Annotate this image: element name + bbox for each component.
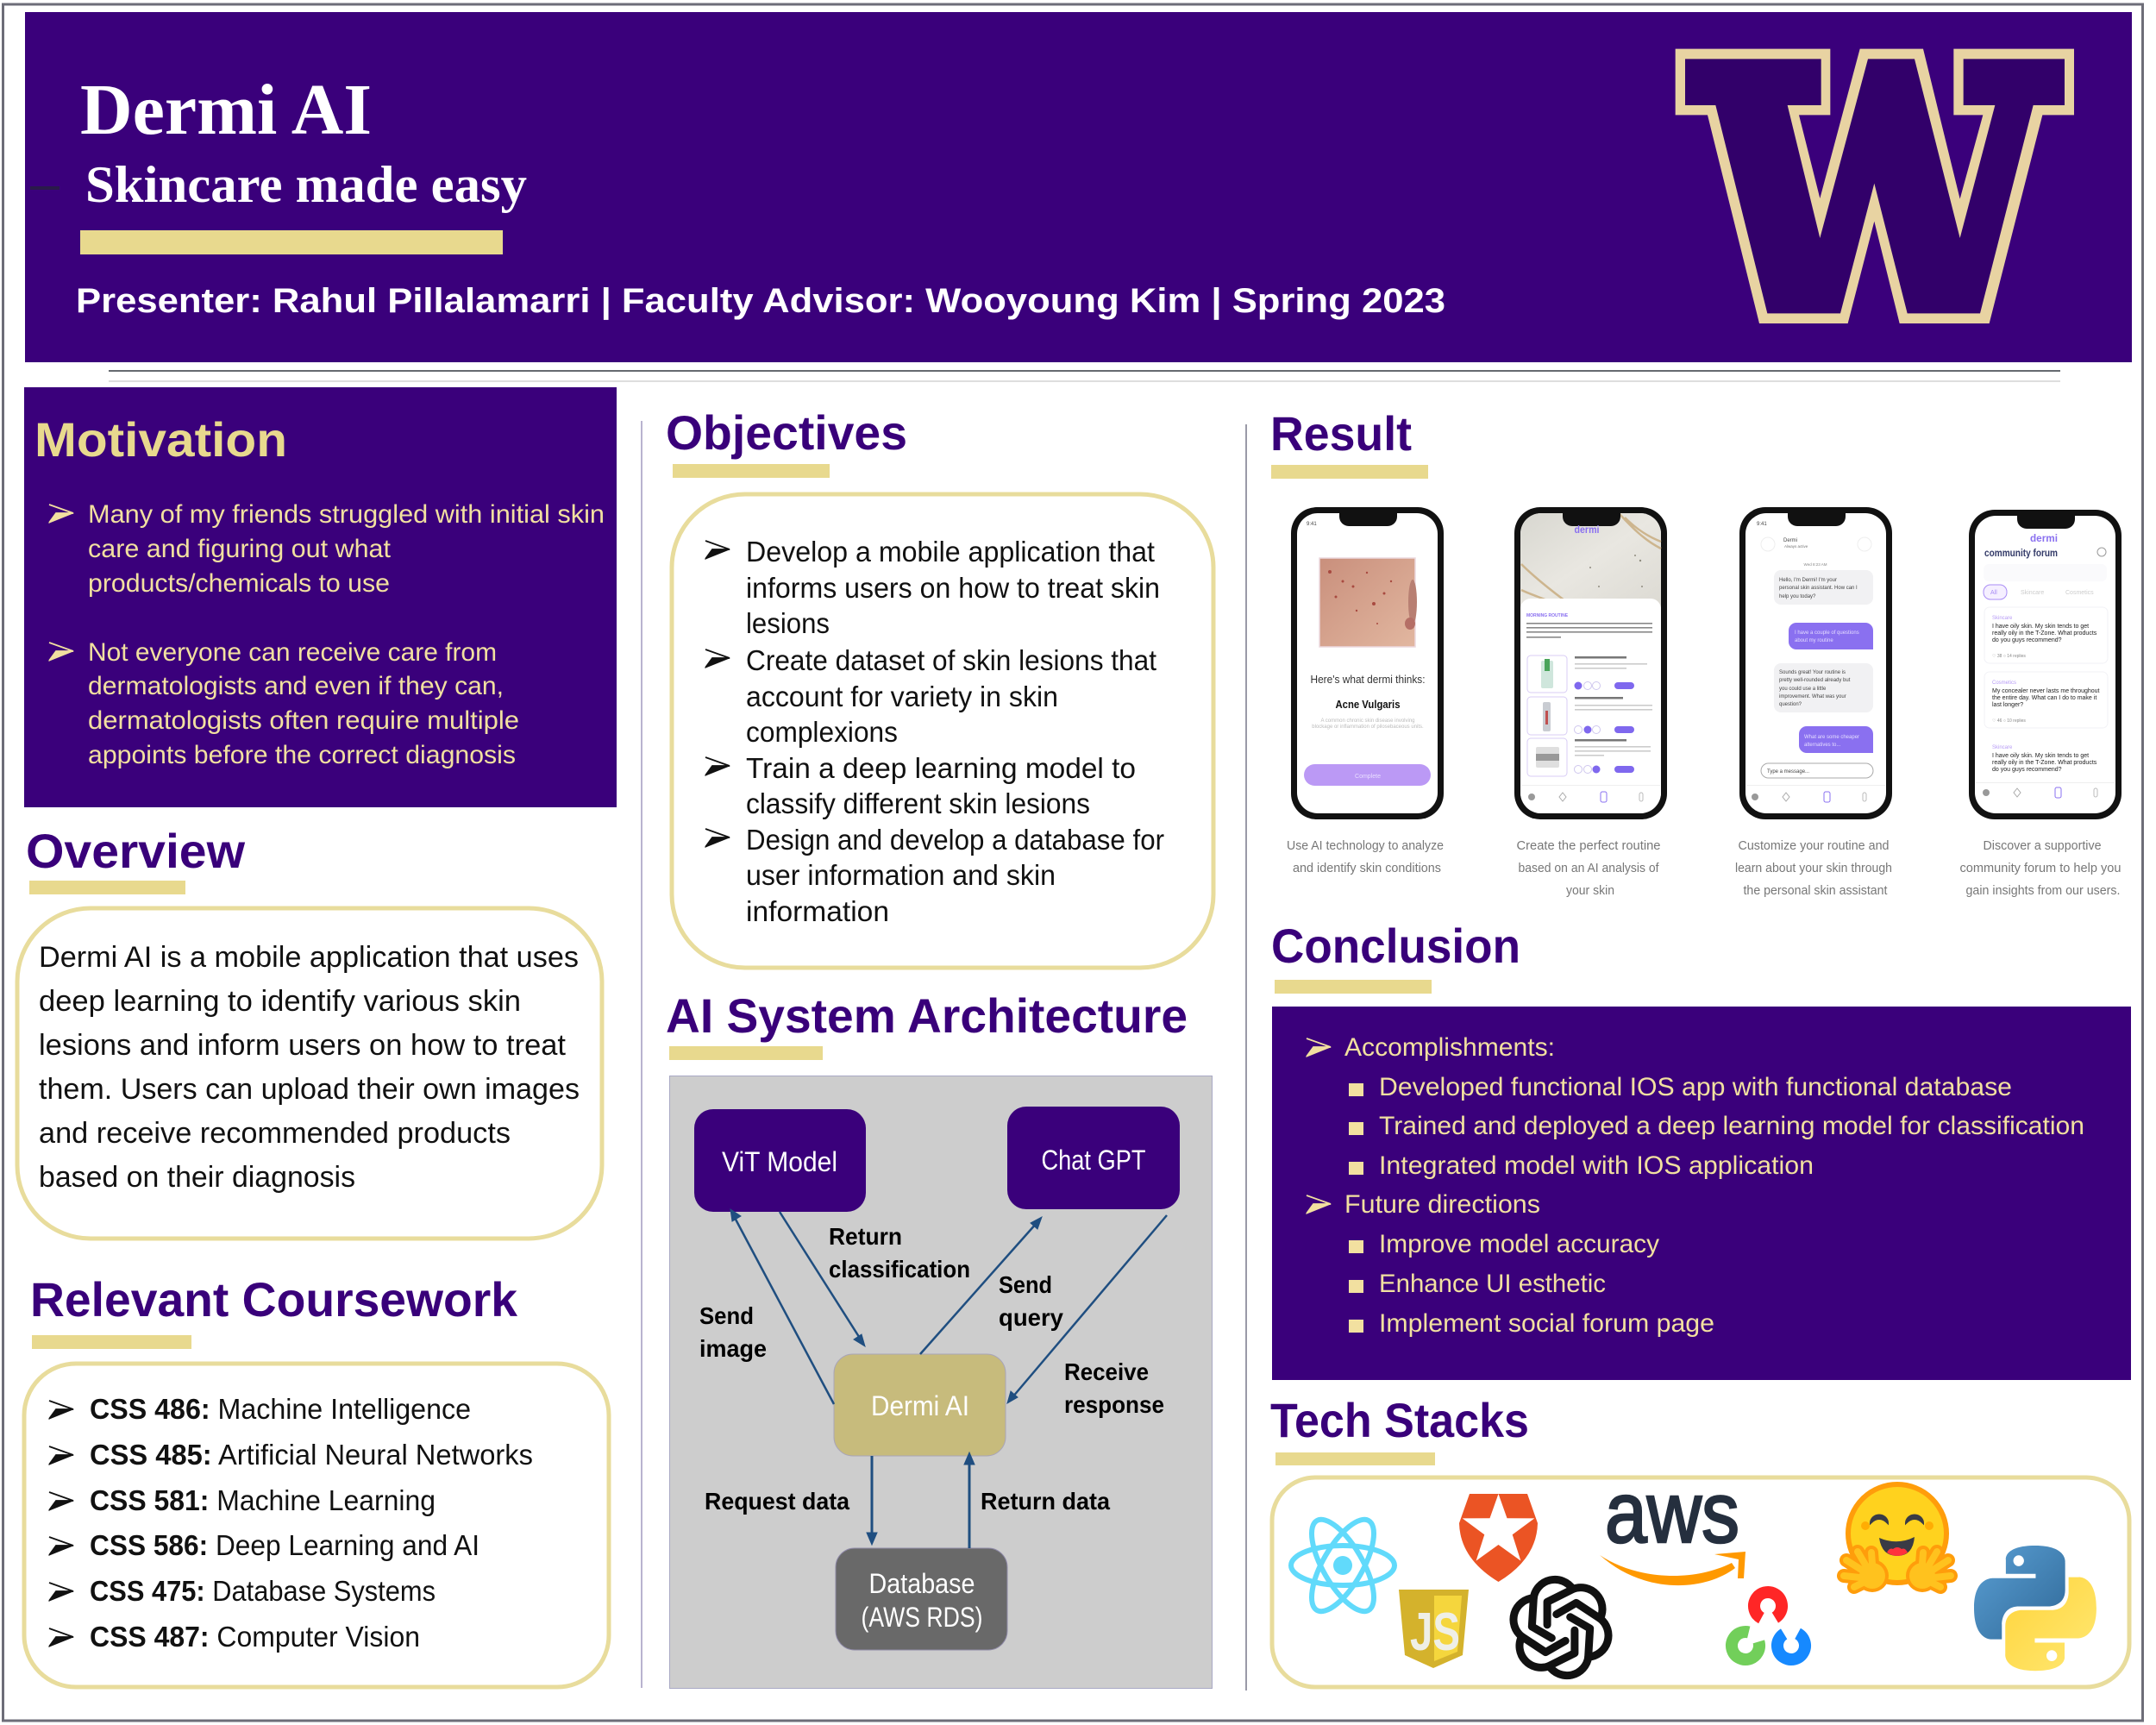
heading: conclusion: Conclusion [1271, 919, 1520, 973]
chat bubbles: alternatives to... [1804, 743, 1841, 748]
panel: conclusion list: Accomplishments: [1344, 1033, 1555, 1062]
overview paragraph: lesions and inform users on how to treat [39, 1029, 567, 1062]
objectives list: Create dataset of skin lesions that [746, 644, 1156, 676]
forum posts: really oily in the T-Zone. What products [1992, 760, 2097, 766]
gold title bar [80, 230, 503, 254]
chat bubbles: I have a couple of questions [1795, 630, 1859, 636]
title: Dermi AI [80, 70, 372, 150]
panel: conclusion list: Trained and deployed a deep learning model for classification [1379, 1112, 2084, 1140]
chat bubbles: about my routine [1795, 638, 1833, 643]
node: Dermi AI [834, 1354, 1006, 1456]
heading underline [29, 881, 185, 894]
phone captions: the personal skin assistant [1744, 883, 1888, 898]
chat bubbles: you could use a little [1779, 687, 1827, 692]
icon: Auth0 [1459, 1494, 1538, 1582]
phone captions: Customize your routine and [1739, 838, 1889, 853]
overview paragraph: based on their diagnosis [39, 1161, 355, 1194]
icon: AWS: aws [1605, 1465, 1739, 1561]
phone: chat screen: 9:41 [1757, 522, 1767, 527]
bullet list: motivation: dermatologists and even if they can, [88, 672, 504, 700]
phone captions: community forum to help you [1959, 861, 2122, 875]
icon: university W logo [1676, 49, 2074, 323]
section: relevant coursework [24, 1272, 609, 1687]
arrow labels [699, 1223, 1164, 1515]
forum posts: Skincare [1992, 616, 2013, 621]
forum posts: ♡ 46 ○ 10 replies [1992, 718, 2026, 724]
phone: diagnosis screen [1291, 507, 1444, 819]
panel: conclusion list: Improve model accuracy [1379, 1230, 1659, 1258]
node: Chat GPT [1007, 1107, 1180, 1209]
panel: conclusion list: Future directions [1344, 1190, 1540, 1219]
chat bubbles: improvement. What was your [1779, 694, 1846, 699]
forum posts: Skincare [1992, 745, 2013, 750]
objectives list: informs users on how to treat skin [746, 572, 1160, 604]
objectives list: lesions [746, 607, 830, 639]
forum posts [1984, 607, 2108, 773]
arrow labels: Request data [705, 1488, 849, 1515]
chat bubbles: Sounds great! Your routine is [1779, 670, 1846, 675]
skin photo [1319, 558, 1417, 647]
chat bubbles: Type a message... [1767, 769, 1809, 775]
section: overview [17, 824, 602, 1239]
forum posts: really oily in the T-Zone. What products [1992, 630, 2097, 637]
icon: OpenAI [1506, 1579, 1616, 1676]
coursework list: CSS 486: Machine Intelligence [90, 1393, 471, 1425]
panel: conclusion list: Implement social forum page [1379, 1309, 1714, 1338]
header banner [25, 12, 2132, 362]
bullet list: motivation: care and figuring out what [88, 535, 392, 563]
objectives list: classify different skin lesions [746, 787, 1090, 819]
arrow labels: query [999, 1304, 1063, 1331]
heading underline [669, 1046, 823, 1060]
panel: conclusion list: Enhance UI esthetic [1379, 1270, 1606, 1298]
bullet list: motivation: appoints before the correct diagnosis [88, 741, 516, 769]
phone: chat screen: Dermi [1783, 538, 1797, 543]
phone captions: and identify skin conditions [1293, 861, 1441, 875]
phone captions: Use AI technology to analyze [1287, 838, 1444, 853]
coursework list: CSS 475: Database Systems [90, 1575, 436, 1607]
arrow labels: Return data [981, 1488, 1110, 1515]
phone captions: gain insights from our users. [1966, 883, 2120, 898]
phone: chat screen: Wed 8:23 AM [1804, 562, 1827, 567]
icon: Python [1974, 1546, 2096, 1671]
phone: diagnosis screen: 9:41 [1307, 522, 1317, 527]
section: conclusion [1271, 919, 2131, 1380]
phone captions: Create the perfect routine [1516, 838, 1661, 853]
phone: diagnosis screen: Here's what dermi thinks: [1311, 674, 1425, 686]
icon: JavaScript [1399, 1590, 1469, 1668]
objectives list: information [746, 895, 889, 927]
forum posts: do you guys recommend? [1992, 767, 2062, 773]
objectives list [705, 536, 1164, 927]
forum chips: All [1990, 590, 1997, 596]
overview paragraph [39, 941, 580, 1194]
coursework list: CSS 487: Computer Vision [90, 1621, 420, 1653]
heading: relevant coursework: Relevant Coursework [30, 1272, 518, 1327]
product rows [1527, 656, 1652, 776]
forum posts: Cosmetics [1992, 681, 2016, 686]
icon: React [1291, 1511, 1395, 1620]
forum posts: I have oily skin. My skin tends to get [1992, 624, 2089, 630]
complete button [1304, 764, 1431, 786]
bullet list: motivation: products/chemicals to use [88, 569, 390, 598]
heading: architecture: AI System Architecture [666, 988, 1188, 1043]
coursework list: CSS 586: Deep Learning and AI [90, 1529, 479, 1561]
forum chips [1984, 585, 2094, 599]
section: objectives [666, 405, 1213, 968]
overview paragraph: Dermi AI is a mobile application that uses [39, 941, 579, 974]
heading: tech stacks: Tech Stacks [1270, 1393, 1529, 1447]
hero photo [1520, 513, 1661, 607]
section: result [1270, 406, 2122, 898]
node: database: (AWS RDS) [861, 1602, 983, 1633]
objectives list: Develop a mobile application that [746, 536, 1155, 568]
node: Dermi AI: Dermi AI [871, 1390, 969, 1421]
chat bubbles: pretty well-rounded already but [1779, 678, 1851, 683]
complete button: Complete [1355, 774, 1381, 780]
coursework list [48, 1393, 533, 1653]
objectives list: complexions [746, 716, 898, 748]
panel: conclusion list [1272, 1007, 2131, 1380]
heading: overview: Overview [26, 824, 245, 878]
arrow labels: Return [829, 1223, 902, 1250]
forum posts: last longer? [1992, 702, 2023, 708]
arrow labels: classification [829, 1256, 970, 1283]
phone captions: based on an AI analysis of [1518, 861, 1659, 875]
objectives box [672, 494, 1213, 968]
chat bubbles: What are some cheaper [1804, 735, 1859, 740]
panel: conclusion list: Integrated model with IOS application [1379, 1151, 1814, 1180]
phone captions: Discover a supportive [1984, 838, 2101, 853]
forum posts: the entire day. What can I do to make it [1992, 695, 2096, 701]
phone: routine screen [1514, 507, 1667, 819]
arrow labels: response [1064, 1391, 1164, 1418]
heading underline [32, 1335, 191, 1349]
objectives list: user information and skin [746, 859, 1056, 891]
phone captions: your skin [1566, 883, 1614, 898]
panel: motivation [24, 387, 617, 807]
coursework box [24, 1364, 609, 1687]
arrow labels: Send [699, 1302, 754, 1329]
heading: objectives: Objectives [666, 405, 907, 460]
node: Chat GPT: Chat GPT [1042, 1145, 1145, 1176]
chat bubbles: Hello, I'm Dermi! I'm your [1779, 578, 1837, 583]
section: architecture [666, 988, 1213, 1689]
arrow labels: image [699, 1335, 767, 1362]
heading underline [673, 464, 830, 478]
overview paragraph: deep learning to identify various skin [39, 985, 521, 1018]
forum posts: do you guys recommend? [1992, 637, 2062, 643]
icon: JavaScript: JS [1410, 1603, 1460, 1662]
phone captions: learn about your skin through [1735, 861, 1892, 875]
phone captions [1287, 838, 2122, 898]
small dash mark [30, 186, 60, 190]
bullet list: motivation [48, 500, 605, 769]
node: ViT model: ViT Model [722, 1146, 837, 1177]
objectives list: Design and develop a database for [746, 824, 1164, 856]
forum posts: My concealer never lasts me throughout [1992, 688, 2100, 694]
diagram: system architecture [669, 1076, 1213, 1689]
forum posts: I have oily skin. My skin tends to get [1992, 753, 2089, 759]
phone: community forum screen: dermi [2030, 532, 2058, 544]
tech stacks box [1272, 1477, 2129, 1687]
chat bubbles: personal skin assistant. How can I [1779, 586, 1858, 591]
icon: OpenCV [1728, 1587, 1810, 1665]
chat bubbles: question? [1779, 702, 1802, 707]
phone: diagnosis screen: blockage or inflammation of pilosebaceous units. [1312, 724, 1424, 730]
coursework list: CSS 485: Artificial Neural Networks [90, 1439, 533, 1471]
arrow labels: Receive [1064, 1358, 1149, 1385]
forum chips: Cosmetics [2065, 590, 2094, 596]
node: database [836, 1548, 1007, 1650]
coursework list: CSS 581: Machine Learning [90, 1484, 436, 1516]
heading underline [1275, 980, 1432, 994]
phone: diagnosis screen: A common chronic skin disease involving [1320, 718, 1415, 724]
icon: Hugging Face [1844, 1484, 1951, 1592]
phone: chat screen: Always active [1784, 544, 1808, 549]
subtitle: Skincare made easy [85, 156, 527, 213]
node: ViT model [694, 1109, 866, 1212]
panel: conclusion list: Developed functional IOS app with functional database [1379, 1073, 2012, 1101]
overview paragraph: and receive recommended products [39, 1117, 511, 1150]
bullet list: motivation: Many of my friends struggled with initial skin [88, 500, 605, 529]
phone: chat screen [1739, 507, 1892, 819]
arrow labels: Send [999, 1271, 1052, 1298]
overview paragraph: them. Users can upload their own images [39, 1073, 580, 1106]
heading: motivation: Motivation [34, 412, 287, 467]
objectives list: account for variety in skin [746, 681, 1058, 712]
forum posts: ♡ 38 ○ 14 replies [1992, 654, 2026, 659]
phone: routine screen: MORNING ROUTINE [1526, 613, 1569, 618]
phone: routine screen: dermi [1575, 524, 1599, 536]
phone: community forum screen [1969, 510, 2122, 819]
chat bubbles: help you today? [1779, 594, 1816, 599]
phone: diagnosis screen: Acne Vulgaris [1335, 699, 1401, 711]
overview text box [17, 908, 602, 1239]
bullet list: motivation: dermatologists often require multiple [88, 706, 519, 735]
heading underline [1275, 1452, 1435, 1465]
phone: community forum screen: community forum [1984, 547, 2058, 559]
heading underline [1271, 465, 1428, 479]
presenter line: Presenter: Rahul Pillalamarri | Faculty Advisor: Wooyoung Kim | Spring 2023 [76, 282, 1445, 320]
bullet list: motivation: Not everyone can receive care from [88, 638, 497, 667]
heading: result: Result [1270, 406, 1412, 461]
objectives list: Train a deep learning model to [746, 752, 1136, 784]
chat bubbles [1761, 570, 1873, 778]
section: tech stacks [1270, 1393, 2129, 1687]
forum chips: Skincare [2021, 590, 2044, 596]
node: database: Database [869, 1568, 975, 1599]
arrows [730, 1209, 1167, 1548]
